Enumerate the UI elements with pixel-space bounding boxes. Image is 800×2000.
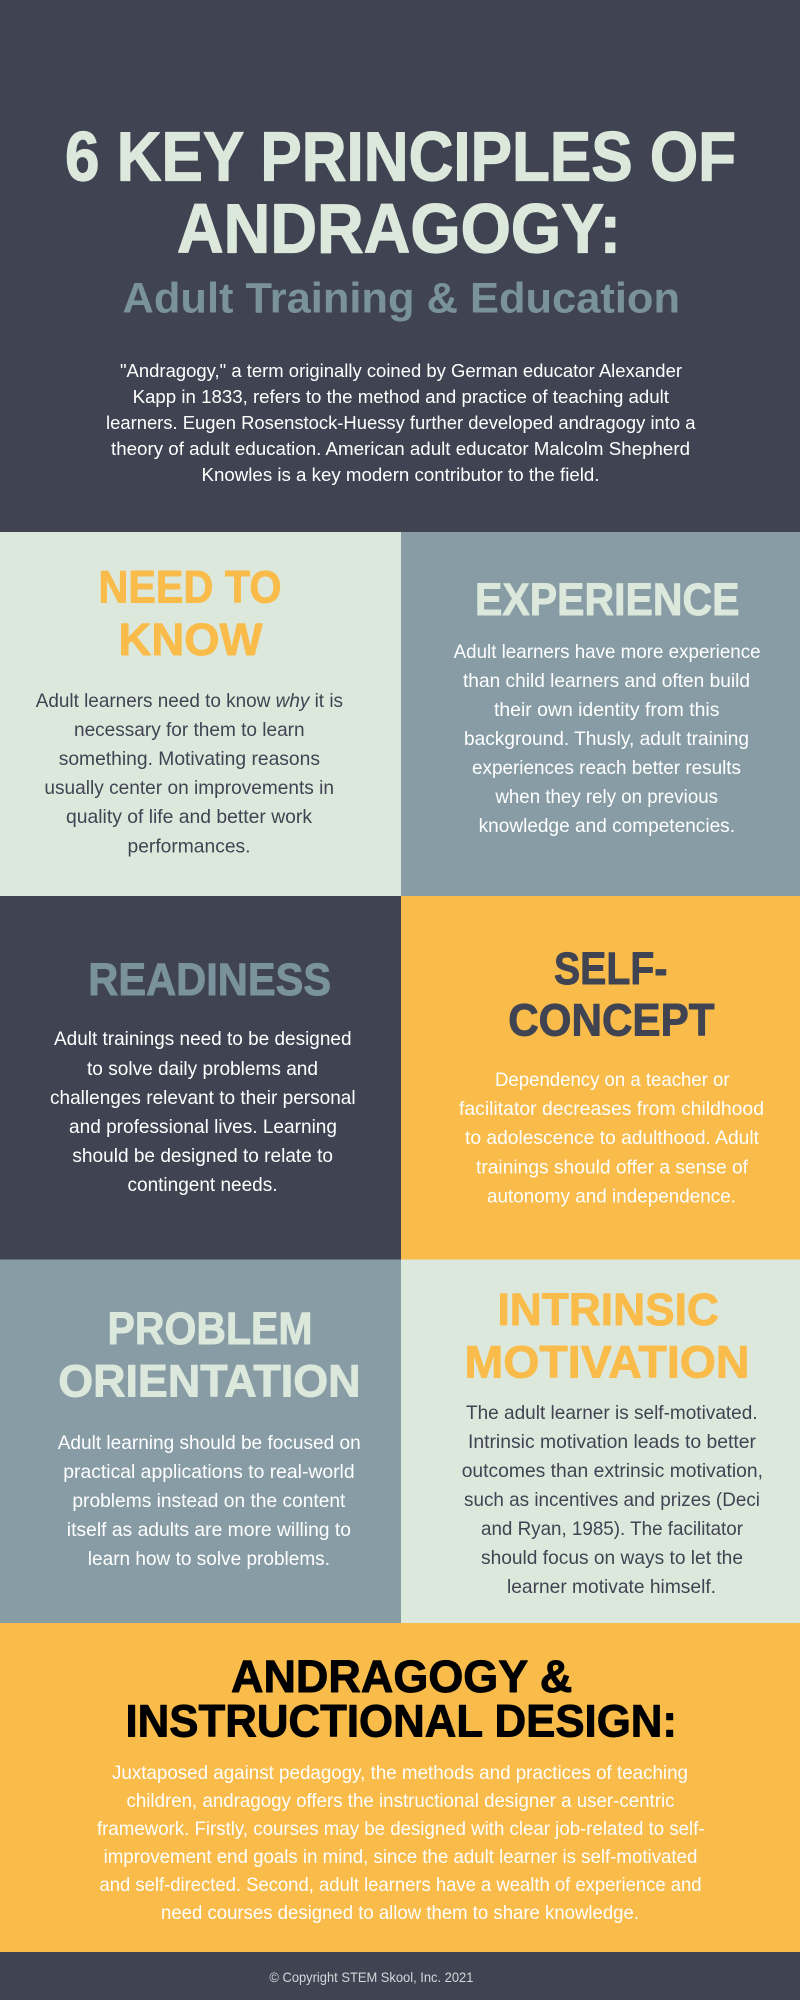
heading: self-concept	[508, 943, 714, 1046]
text: readiness: contingent needs.	[128, 1174, 278, 1196]
text: instructional design: framework. Firstly, courses may be designed with clear job-related to self-	[97, 1818, 705, 1840]
heading: intrinsic motivation	[464, 1284, 750, 1388]
text: instructional design: need courses designed to allow them to share knowledge.	[161, 1902, 639, 1924]
text: intrinsic motivation: The adult learner is self-motivated.	[466, 1402, 758, 1424]
text: instructional design: and self-directed. Second, adult learners have a wealth of experience and	[100, 1874, 702, 1896]
panel: problem orientation	[0, 1260, 401, 1623]
text: readiness: and professional lives. Learning	[69, 1116, 337, 1138]
text: need to know: performances.	[128, 836, 250, 858]
text: need to know: usually center on improvements in	[44, 777, 334, 799]
title: ANDRAGOGY:	[177, 190, 621, 268]
text: self-concept: autonomy and independence.	[487, 1186, 736, 1208]
text: experience	[454, 641, 761, 837]
text: instructional design: improvement end goals in mind, since the adult learner is self-motivated	[104, 1846, 697, 1868]
subtitle: Adult Training & Education	[122, 274, 680, 322]
text: need to know: necessary for them to learn	[74, 719, 305, 741]
text: experience: than child learners and often build	[463, 670, 750, 692]
text: readiness: challenges relevant to their personal	[50, 1087, 356, 1109]
text: problem orientation: learn how to solve problems.	[88, 1548, 330, 1570]
intro text: learners. Eugen Rosenstock-Huessy further developed andragogy into a	[106, 412, 696, 433]
heading: readiness: READINESS	[88, 954, 331, 1005]
text: readiness: Adult trainings need to be designed	[54, 1028, 352, 1050]
title	[65, 118, 736, 268]
text: readiness	[50, 1028, 356, 1196]
text: problem orientation: Adult learning should be focused on	[58, 1432, 361, 1454]
heading: problem orientation: ORIENTATION	[58, 1356, 360, 1407]
heading: need to know: NEED TO	[98, 562, 282, 612]
text: intrinsic motivation: outcomes than extrinsic motivation,	[462, 1460, 763, 1482]
panel: header	[0, 0, 800, 532]
intro text	[106, 360, 696, 485]
text: experience: Adult learners have more experience	[454, 641, 761, 663]
panel: self-concept	[401, 896, 800, 1260]
title: 6 KEY PRINCIPLES OF	[65, 118, 736, 196]
heading: need to know: KNOW	[118, 614, 263, 665]
heading: need to know	[98, 562, 282, 665]
text: problem orientation	[58, 1432, 361, 1570]
text: intrinsic motivation: should focus on ways to let the	[481, 1547, 743, 1569]
text: need to know: something. Motivating reasons	[59, 748, 320, 770]
text: intrinsic motivation: learner motivate himself.	[507, 1576, 716, 1598]
heading: problem orientation	[58, 1303, 360, 1407]
text: intrinsic motivation: and Ryan, 1985). The facilitator	[481, 1518, 743, 1540]
text: self-concept: Dependency on a teacher or	[495, 1069, 730, 1091]
text: self-concept: to adolescence to adulthood. Adult	[465, 1127, 760, 1149]
panel: footer	[0, 1952, 800, 2000]
text: self-concept: trainings should offer a sense of	[476, 1157, 749, 1179]
intro text: Kapp in 1833, refers to the method and practice of teaching adult	[133, 386, 669, 407]
text: problem orientation: itself as adults are more willing to	[67, 1519, 351, 1541]
text: self-concept: facilitator decreases from childhood	[459, 1098, 764, 1120]
text: need to know: Adult learners need to know why it is	[36, 690, 343, 712]
text: experience: their own identity from this	[494, 699, 720, 721]
text: instructional design	[97, 1762, 705, 1924]
text: experience: knowledge and competencies.	[479, 815, 735, 837]
heading: andragogy and instructional design: INSTRUCTIONAL DESIGN:	[126, 1696, 677, 1747]
text: need to know: quality of life and better work	[66, 806, 312, 828]
heading: self-concept: CONCEPT	[508, 995, 714, 1046]
heading: intrinsic motivation: INTRINSIC	[498, 1284, 719, 1335]
text: need to know	[36, 690, 343, 858]
footer copyright: © Copyright STEM Skool, Inc. 2021	[269, 1969, 474, 1985]
heading: problem orientation: PROBLEM	[108, 1303, 312, 1354]
panel: need to know	[0, 532, 401, 896]
text: problem orientation: practical applications to real-world	[63, 1461, 355, 1483]
panel: intrinsic motivation	[401, 1260, 800, 1623]
heading: andragogy and instructional design	[126, 1651, 677, 1747]
heading: intrinsic motivation: MOTIVATION	[464, 1337, 750, 1388]
text: experience: when they rely on previous	[494, 786, 718, 808]
text: experience: background. Thusly, adult training	[464, 728, 749, 750]
intro text: theory of adult education. American adult educator Malcolm Shepherd	[111, 438, 690, 459]
panel: andragogy and instructional design	[0, 1623, 800, 1952]
panel: experience	[401, 532, 800, 896]
heading: experience: EXPERIENCE	[475, 574, 740, 625]
heading: self-concept: SELF-	[554, 943, 667, 994]
heading: andragogy and instructional design: ANDRAGOGY &	[231, 1651, 572, 1702]
text: experience: experiences reach better results	[472, 757, 741, 779]
text: intrinsic motivation: such as incentives and prizes (Deci	[464, 1489, 760, 1511]
text: instructional design: Juxtaposed against pedagogy, the methods and practices of teaching	[112, 1762, 688, 1784]
intro text: Knowles is a key modern contributor to the field.	[202, 464, 600, 485]
text: problem orientation: problems instead on the content	[72, 1490, 346, 1512]
text: instructional design: children, andragogy offers the instructional designer a user-centric	[126, 1790, 675, 1812]
text: readiness: should be designed to relate to	[72, 1145, 333, 1167]
text: self-concept	[459, 1069, 764, 1208]
panel: readiness	[0, 896, 401, 1260]
text: readiness: to solve daily problems and	[87, 1058, 318, 1080]
intro text: "Andragogy," a term originally coined by German educator Alexander	[120, 360, 682, 381]
text: intrinsic motivation	[462, 1402, 763, 1598]
text: intrinsic motivation: Intrinsic motivation leads to better	[468, 1431, 756, 1453]
